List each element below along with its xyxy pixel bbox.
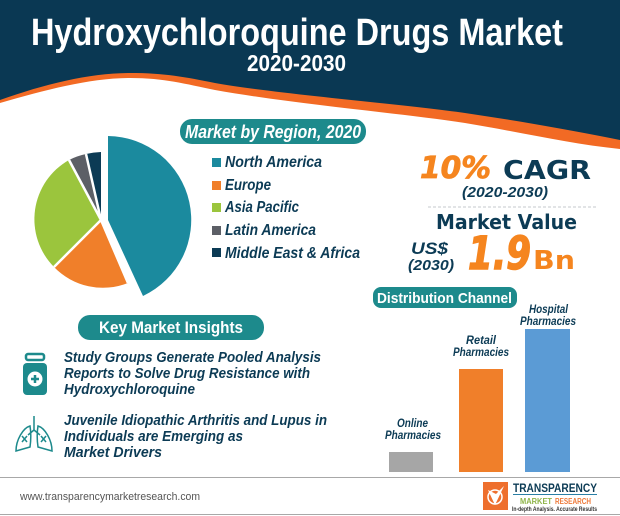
insight text 2: Market Drivers (64, 445, 162, 461)
insight text 1: Hydroxychloroquine (64, 382, 195, 398)
subtitle: years: 2020-2030 (247, 50, 346, 76)
legend: Asia Pacific (224, 199, 299, 216)
insight text 2: Juvenile Idiopathic Arthritis and Lupus in (64, 413, 327, 429)
legend: Middle East & Africa (225, 245, 360, 262)
logo: RESEARCH (555, 497, 591, 506)
legend (212, 154, 360, 262)
pie chart (34, 136, 191, 296)
bar labels: Pharmacies (453, 347, 509, 359)
stat: market value (408, 210, 577, 280)
bar labels: Online (397, 418, 429, 430)
insight text 2 (64, 413, 327, 461)
heading: key market insights: Key Market Insights (99, 318, 243, 337)
heading: distribution channel: Distribution Channel (377, 290, 512, 307)
stat: CAGR (420, 151, 591, 201)
stat: market value: Market Value (436, 210, 577, 234)
stat: market value: 1.9 (468, 227, 531, 280)
stat: market value: (2030) (408, 257, 454, 274)
bar labels: Hospital (529, 304, 569, 316)
stat: market value: US$ (411, 239, 449, 258)
heading: market by region: Market by Region, 2020 (185, 122, 361, 142)
bar: retail pharmacies (459, 369, 503, 472)
stat: market value: Bn (533, 246, 575, 276)
legend: Europe (225, 177, 271, 194)
logo: MARKET (520, 497, 552, 506)
icon: lungs (16, 416, 52, 451)
heading: key market insights (78, 315, 264, 340)
bar: hospital pharmacies (525, 329, 570, 472)
bar: online pharmacies (389, 452, 433, 472)
bar labels: Pharmacies (385, 430, 441, 442)
legend: Latin America (225, 222, 316, 239)
insight text 1: Reports to Solve Drug Resistance with (64, 366, 310, 382)
header banner (0, 0, 620, 220)
stat: CAGR: (2020-2030) (462, 184, 548, 201)
logo (483, 481, 598, 513)
insight text 2: Individuals are Emerging as (64, 429, 243, 445)
legend: North America (225, 154, 322, 171)
logo: In-depth Analysis. Accurate Results (512, 507, 598, 513)
stat: CAGR: 10% (420, 151, 491, 186)
bar labels (385, 304, 576, 442)
stat: CAGR: CAGR (503, 156, 591, 186)
logo: TRANSPARENCY (513, 481, 597, 495)
website url: www.transparencymarketresearch.com (19, 491, 200, 503)
bar chart (385, 304, 576, 472)
bar labels: Pharmacies (520, 316, 576, 328)
icon: medicine bottle (23, 354, 47, 395)
footer rules (0, 478, 620, 514)
insight text 1 (64, 350, 321, 398)
insight text 1: Study Groups Generate Pooled Analysis (64, 350, 321, 366)
bar labels: Retail (466, 335, 497, 347)
